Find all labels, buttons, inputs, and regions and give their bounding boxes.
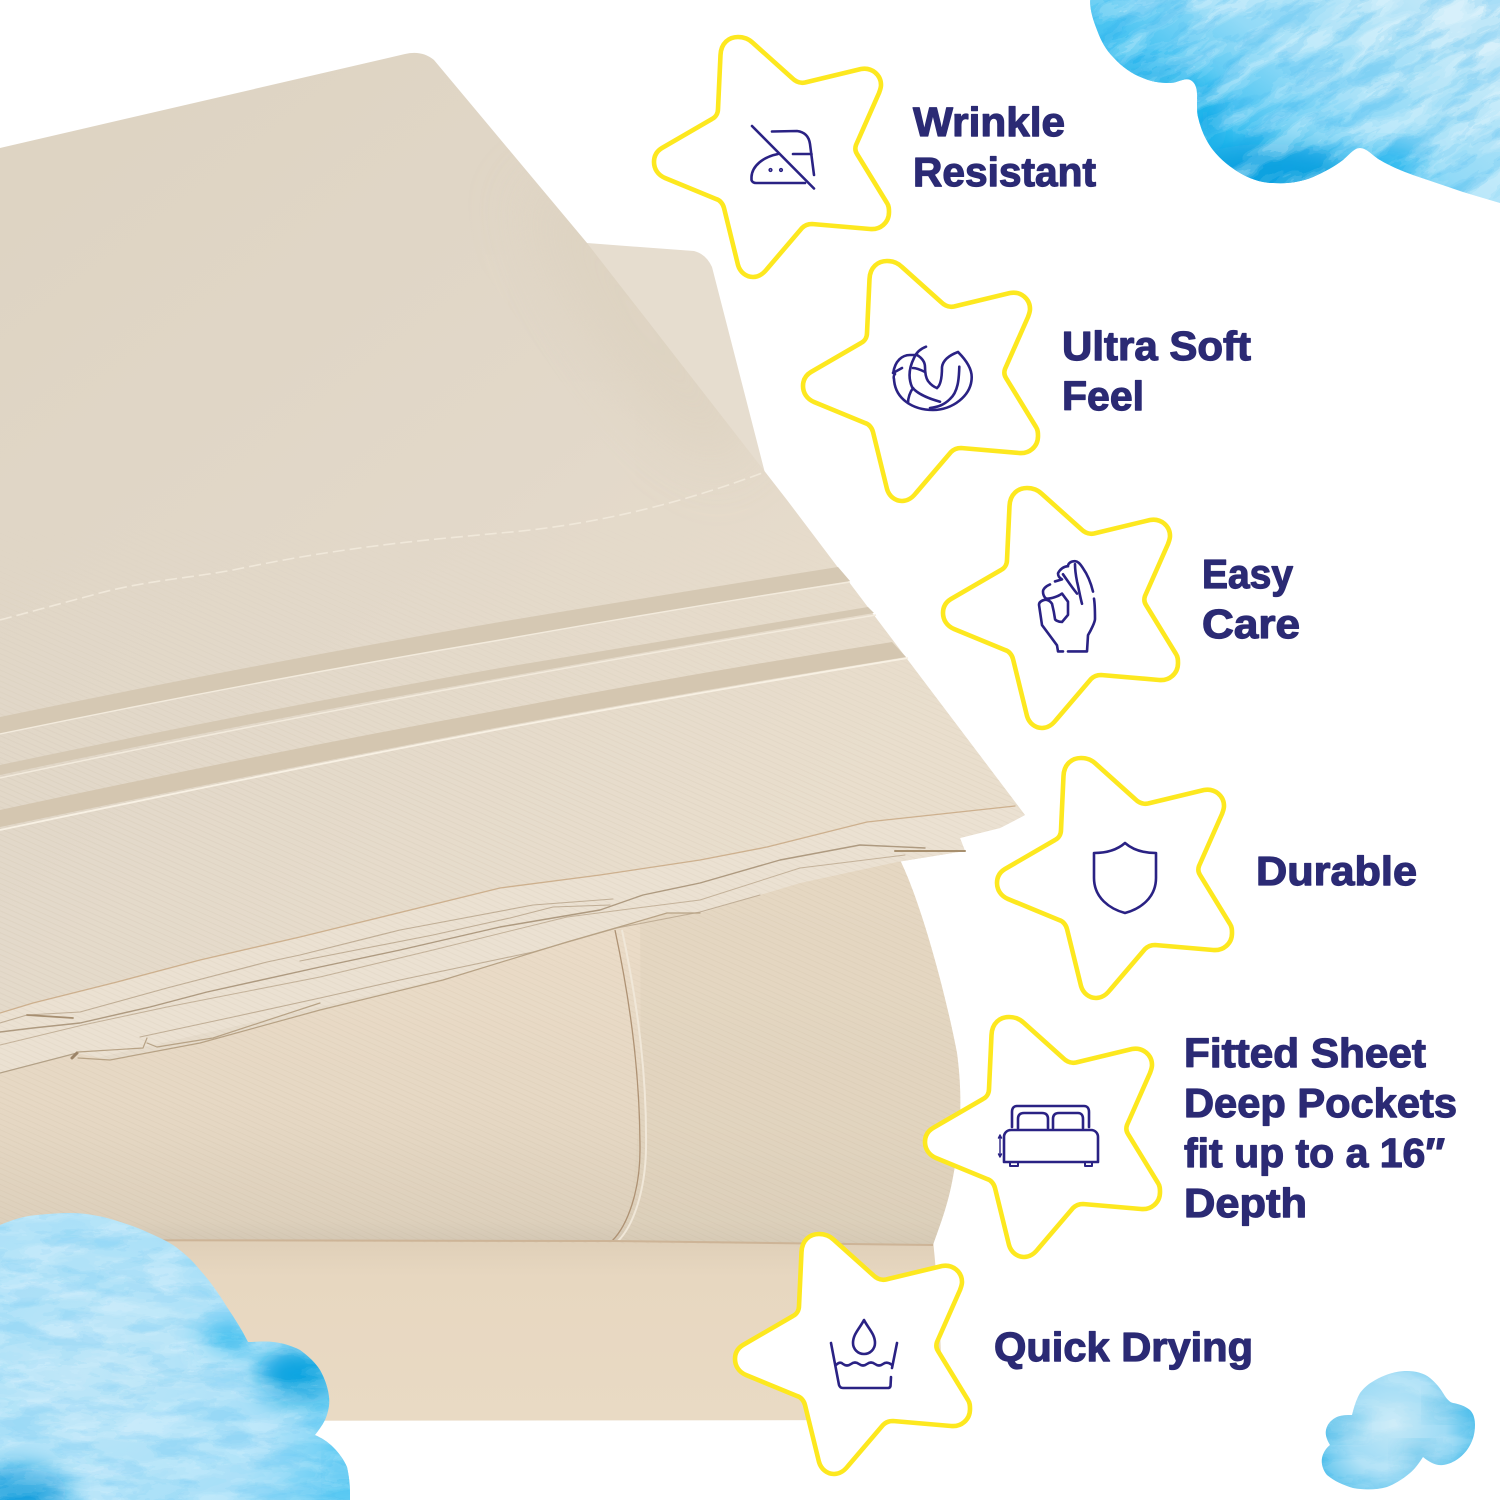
icon: bed xyxy=(998,1106,1098,1166)
label: Fitted Sheet xyxy=(1184,1030,1426,1076)
label: Depth xyxy=(1184,1180,1307,1226)
sheet seam xyxy=(618,930,646,1241)
cloud: top right watercolor xyxy=(1090,0,1500,203)
label xyxy=(1062,323,1251,419)
label: Care xyxy=(1202,601,1300,647)
star badge xyxy=(943,488,1178,728)
label xyxy=(913,99,1096,195)
decorative hem stripes xyxy=(0,567,908,830)
hem stitching xyxy=(0,472,765,620)
pillowcase shading xyxy=(0,152,1030,1080)
label: fit up to a 16″ xyxy=(1184,1130,1445,1176)
cloud: bottom left watercolor xyxy=(0,1200,360,1500)
feature: fitted sheet deep pockets xyxy=(925,1017,1457,1257)
label: Resistant xyxy=(913,149,1096,195)
feature: wrinkle resistant xyxy=(654,37,1096,277)
label: Quick Drying xyxy=(994,1324,1253,1370)
folded edge lines xyxy=(0,806,1015,1073)
label: Deep Pockets xyxy=(1184,1080,1457,1126)
bottom folded sheet xyxy=(0,1235,942,1421)
front pillowcase xyxy=(0,53,1025,1073)
label: Ultra Soft xyxy=(1062,323,1251,369)
sheet edge line xyxy=(0,1240,933,1245)
star badge xyxy=(735,1234,970,1474)
label: Durable xyxy=(1256,848,1417,894)
star badge xyxy=(654,37,889,277)
cloud: small bottom right watercolor xyxy=(1322,1371,1475,1490)
middle folded fitted sheet xyxy=(0,860,960,1245)
icon: ok hand xyxy=(1039,561,1095,651)
icon: water drop over basin xyxy=(831,1320,897,1388)
star badge xyxy=(925,1017,1160,1257)
star badge xyxy=(803,261,1038,501)
icon: feather ball xyxy=(893,347,972,410)
feature: durable xyxy=(997,758,1417,998)
icon: shield xyxy=(1094,843,1156,913)
photo: folded beige sheet stack xyxy=(0,53,1030,1421)
label xyxy=(1184,1030,1457,1226)
star badge xyxy=(997,758,1232,998)
feature: easy care xyxy=(943,488,1300,728)
label: Feel xyxy=(1062,373,1144,419)
label: Wrinkle xyxy=(913,99,1065,145)
rear pillowcase corner xyxy=(500,243,800,540)
icon: crossed-out iron xyxy=(752,126,814,188)
label xyxy=(1202,551,1300,647)
label: Easy xyxy=(1202,551,1293,597)
feature: quick drying xyxy=(735,1234,1253,1474)
feature: ultra soft feel xyxy=(803,261,1251,501)
